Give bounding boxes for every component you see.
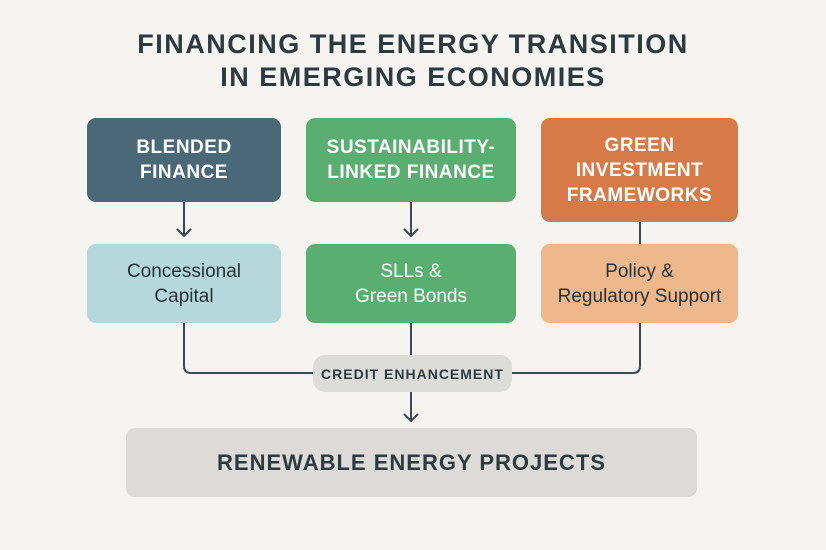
title: FINANCING THE ENERGY TRANSITION [137, 29, 689, 59]
panel: concessional capital: Capital [154, 286, 214, 306]
credit enhancement pill [313, 355, 512, 392]
panel: sustainability-linked finance: LINKED FINANCE [327, 162, 495, 183]
panel: policy & regulatory support: Policy & [605, 260, 674, 282]
panel: green investment frameworks: FRAMEWORKS [567, 184, 712, 206]
panel: sustainability-linked finance [306, 118, 516, 202]
renewable energy projects [126, 428, 697, 497]
renewable energy projects: RENEWABLE ENERGY PROJECTS [217, 450, 606, 474]
panel: blended finance: FINANCE [140, 162, 228, 183]
panel: concessional capital [87, 244, 281, 323]
panel: green investment frameworks: INVESTMENT [576, 160, 703, 180]
panel: policy & regulatory support: Regulatory Support [558, 286, 721, 306]
panel: concessional capital: Concessional [127, 260, 241, 282]
panel: green investment frameworks: GREEN [604, 134, 675, 156]
title [137, 29, 689, 92]
panel: sustainability-linked finance: SUSTAINABILITY- [327, 137, 495, 158]
panel: policy & regulatory support [541, 244, 738, 323]
panel: SLLs & green bonds: SLLs & [380, 260, 442, 282]
credit enhancement pill: CREDIT ENHANCEMENT [321, 366, 504, 382]
title: IN EMERGING ECONOMIES [220, 62, 606, 92]
panel: SLLs & green bonds: Green Bonds [355, 286, 467, 306]
panel: SLLs & green bonds [306, 244, 516, 323]
panel: blended finance [87, 118, 281, 202]
panel: green investment frameworks [541, 118, 738, 222]
panel: blended finance: BLENDED [136, 137, 232, 158]
